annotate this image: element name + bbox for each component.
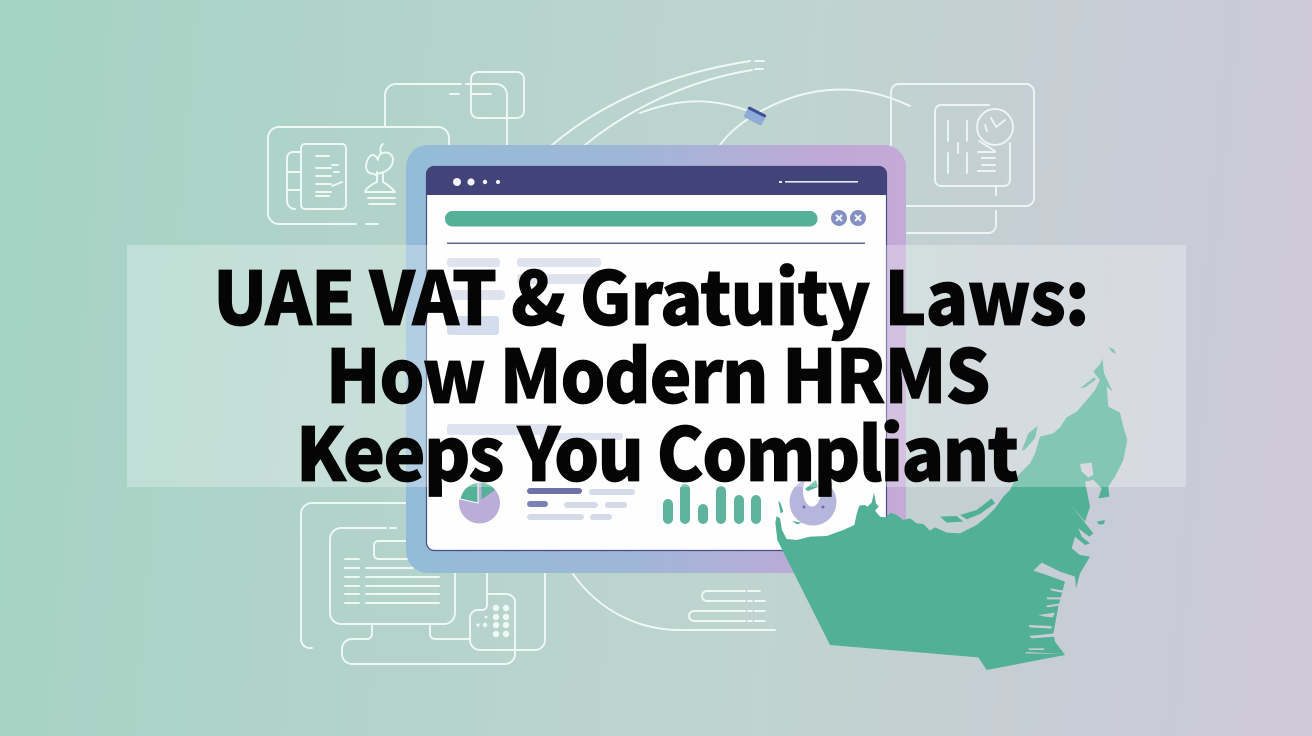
map: coastal islands (778, 347, 1116, 525)
bar chart (663, 484, 761, 524)
map: UAE silhouette (775, 347, 1127, 670)
browser window (426, 166, 887, 550)
icon: checklist card top right (891, 84, 1034, 233)
map: inlets and lagoon (1025, 463, 1093, 654)
icon: stylized arc and text pills bottom (573, 574, 775, 630)
icon: document card top left (268, 72, 524, 224)
donut gauge (790, 476, 836, 526)
icon: keypad dots (476, 605, 509, 637)
pie chart (459, 482, 500, 524)
title: Keeps You Compliant (296, 396, 1017, 503)
placeholder text rows (447, 258, 623, 440)
title (213, 240, 1088, 503)
divider (447, 242, 865, 244)
green header bar (445, 211, 818, 226)
header buttons (831, 210, 866, 226)
window title bar (426, 166, 887, 195)
title: UAE VAT & Gratuity Laws: (213, 240, 1088, 347)
list rows (527, 488, 635, 520)
icon: monitor and keypad bottom left (301, 503, 545, 664)
icon: arcs and connector (552, 61, 910, 145)
browser frame (406, 145, 906, 573)
translucent title band (127, 245, 1186, 487)
icon: connector marker (743, 106, 767, 126)
title: How Modern HRMS (326, 318, 989, 425)
